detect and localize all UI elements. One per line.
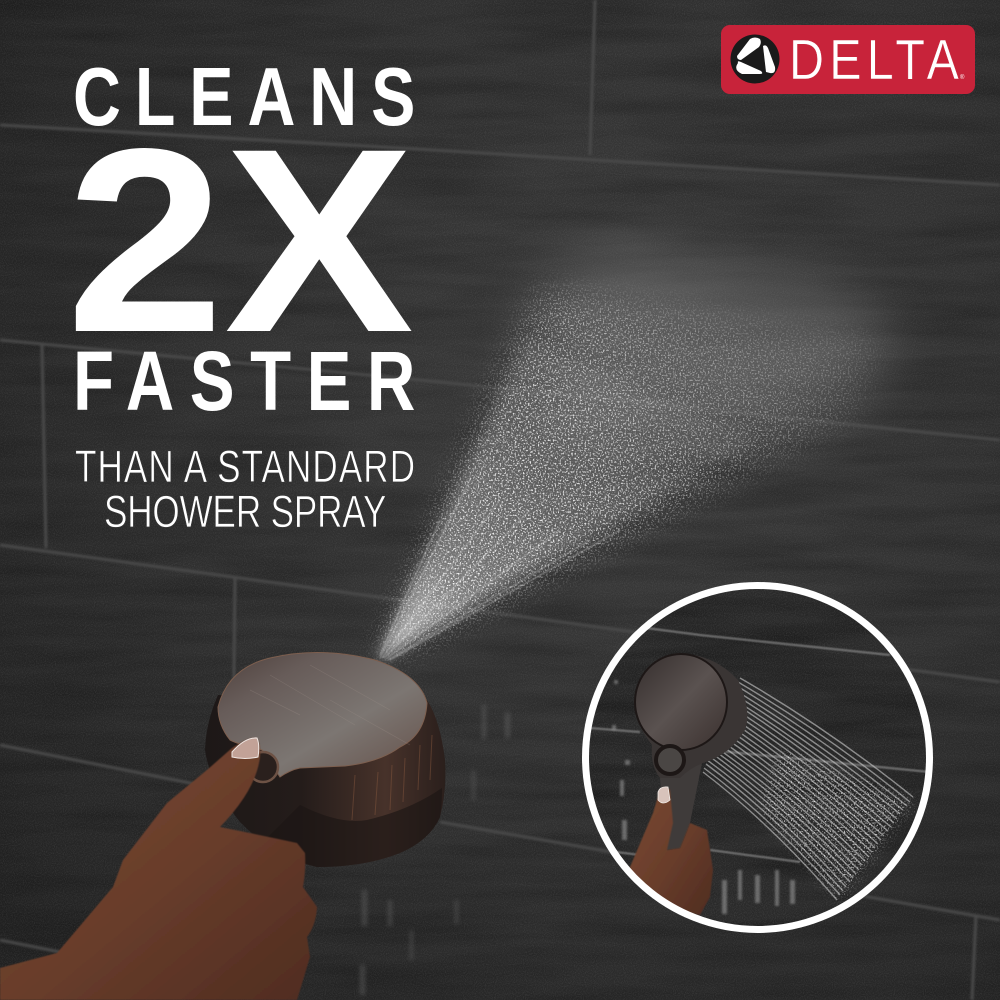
- inset white ring: [586, 586, 930, 930]
- shower head body: [205, 695, 445, 867]
- inset wall texture: [585, 585, 930, 930]
- inset water jets: [703, 678, 913, 900]
- inset shower handle: [660, 763, 702, 850]
- hand pressing button: [0, 738, 317, 1000]
- subheading: than a standard shower spray: [75, 441, 415, 537]
- main shower head product: [205, 652, 445, 867]
- subheading: than a standard shower spray: SHOWER SPRAY: [104, 486, 386, 537]
- inset photo callout: [585, 585, 930, 930]
- fingernail: [232, 738, 259, 758]
- headline: CLEANS 2X FASTER: 2X: [66, 94, 415, 387]
- shower head brushed face: [218, 652, 427, 777]
- logo: Delta badge: DELTA: [789, 28, 960, 92]
- icon: Delta triangle mark: [730, 34, 780, 84]
- headline: CLEANS 2X FASTER: FASTER: [73, 335, 415, 429]
- water spray mist from shower head: [378, 240, 900, 660]
- wall water droplets below spray: [360, 705, 510, 995]
- push button: [248, 752, 278, 782]
- headline: CLEANS 2X FASTER: CLEANS: [73, 50, 415, 143]
- logo: Delta badge: [721, 25, 975, 94]
- logo: Delta badge: ®: [960, 74, 965, 81]
- subheading: than a standard shower spray: THAN A STANDARD: [75, 441, 415, 492]
- inset hand: [630, 788, 713, 915]
- inset shower head rim: [634, 653, 747, 778]
- inset fingernail: [658, 787, 670, 803]
- inset shower head face: [635, 654, 727, 750]
- inset push button: [656, 746, 684, 774]
